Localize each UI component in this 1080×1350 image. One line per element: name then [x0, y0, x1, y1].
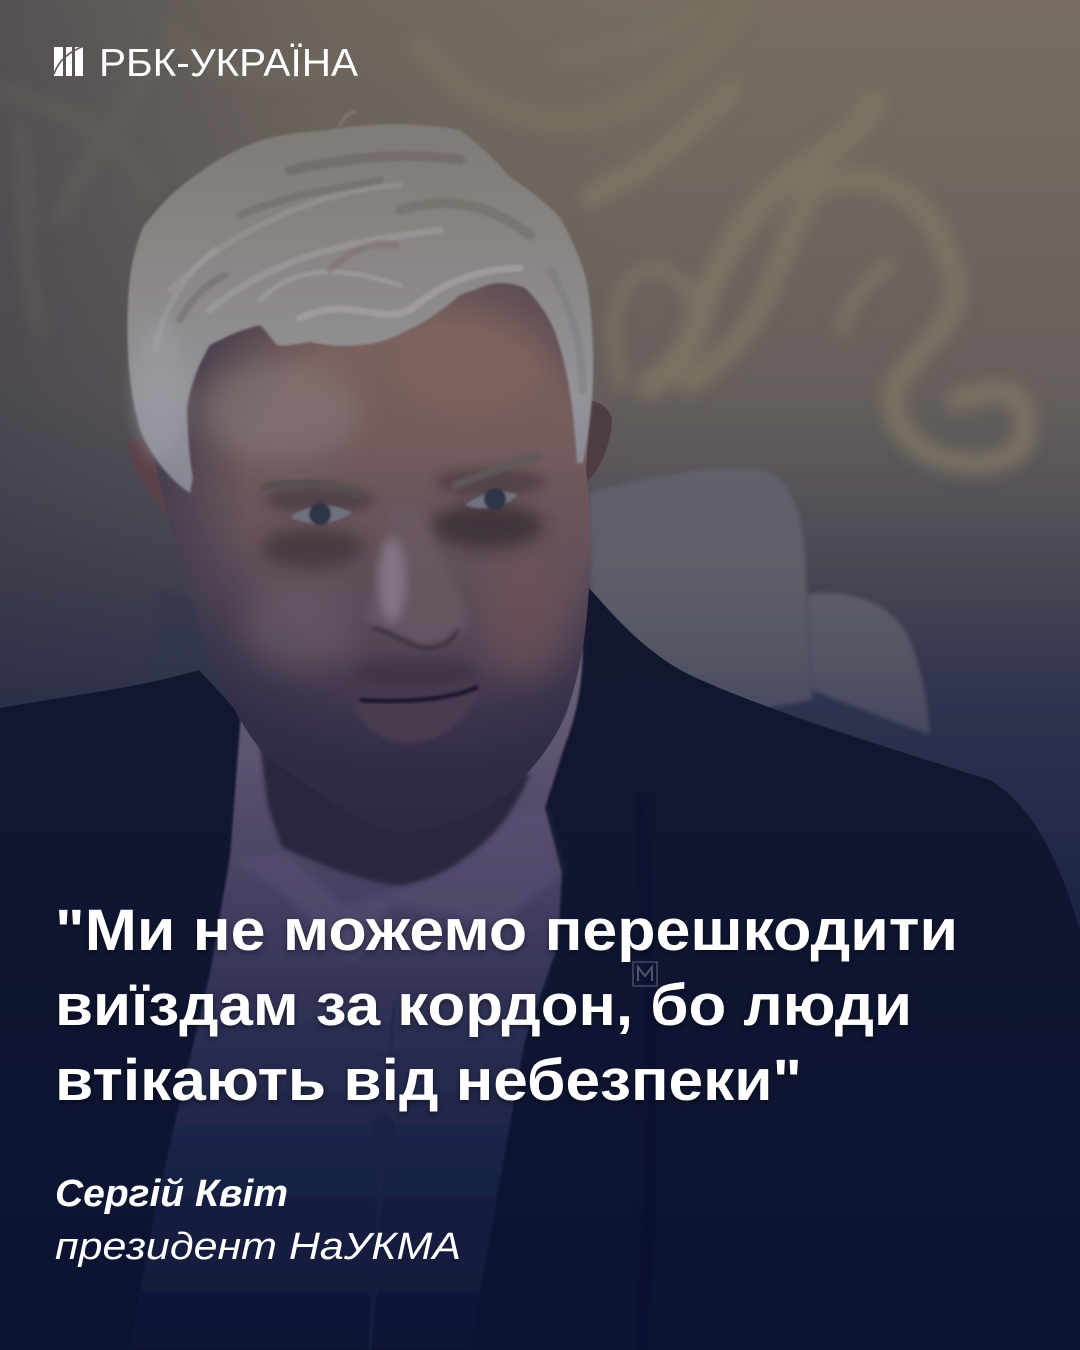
neck — [260, 745, 530, 885]
speaker name: Сергій Квіт — [55, 1173, 288, 1215]
attribution — [55, 1173, 461, 1268]
logo text: РБК-УКРАЇНА — [99, 42, 358, 85]
head: hair — [127, 112, 593, 493]
speaker role: президент НаУКМА — [55, 1226, 461, 1268]
eyes — [290, 488, 518, 525]
head: face — [128, 217, 612, 885]
eye sockets — [261, 528, 365, 568]
logo — [54, 42, 358, 85]
quote: виїздам за кордон, бо люди — [55, 973, 912, 1038]
quote: "Ми не можемо перешкодити — [55, 898, 958, 963]
ears — [128, 437, 190, 515]
quote: втікають від небезпеки" — [55, 1048, 802, 1113]
wall ornament — [0, 0, 1026, 463]
watermark icon — [633, 962, 657, 986]
jacket — [0, 585, 1080, 1350]
armchair — [150, 468, 930, 735]
mouth — [354, 688, 479, 743]
quote — [55, 898, 958, 1113]
nose — [366, 505, 467, 648]
logo icon — [54, 46, 84, 76]
eyebrows — [262, 482, 362, 496]
shirt — [130, 640, 583, 1350]
